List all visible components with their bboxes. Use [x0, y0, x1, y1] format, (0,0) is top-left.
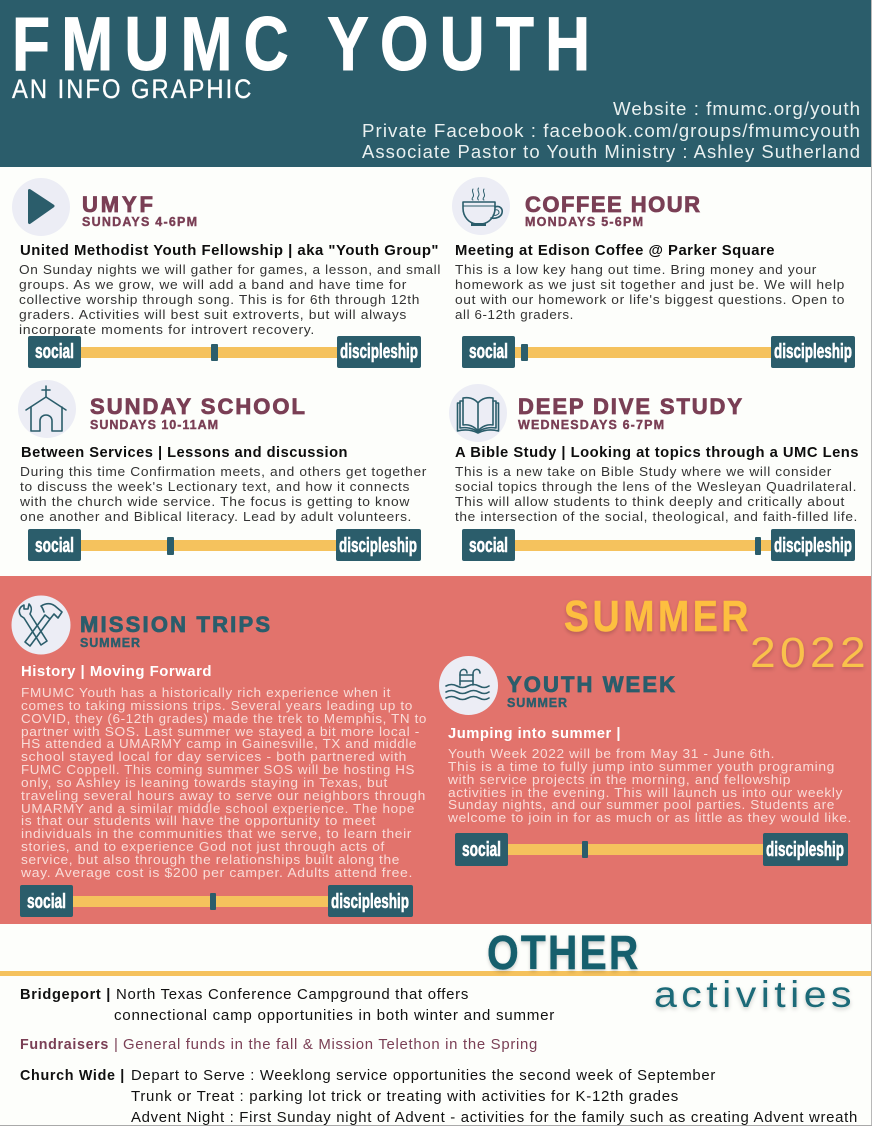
- description: Mission Trips: FUMC Coppell. This coming summer SOS will be hosting HS: [21, 762, 415, 777]
- slider: Mission Trips social to discipleship: [20, 885, 413, 917]
- list item: Bridgeport: connectional camp opportunities in both winter and summer: [114, 1007, 555, 1024]
- contact details: Website : fmumc.org/youth: [613, 99, 861, 119]
- heading: Summer: SUMMER: [564, 591, 748, 641]
- list item: Bridgeport: Bridgeport |: [20, 986, 111, 1003]
- panel: Mission Trips: [12, 596, 427, 917]
- description: Mission Trips: HS attended a UMARMY camp in Gainesville, TX and middle: [21, 736, 417, 751]
- slider: Sunday School social to discipleship: discipleship: [339, 535, 417, 557]
- description: Youth Week: with service projects in the morning, and fellowship: [447, 772, 791, 787]
- description: Deep Dive Study: the intersection of the social, theological, and faith-filled life.: [455, 509, 858, 524]
- slider: Deep Dive Study social to discipleship: [462, 529, 855, 561]
- description: UMYF: On Sunday nights we will gather for games, a lesson, and small: [19, 262, 441, 277]
- subheading: UMYF: United Methodist Youth Fellowship | aka "Youth Group": [20, 242, 439, 259]
- schedule: Youth Week: SUMMER: [507, 696, 567, 710]
- schedule: Sunday School: SUNDAYS 10-11AM: [90, 418, 218, 432]
- icon: coffee cup: [452, 177, 510, 235]
- panel: Deep Dive Study: [449, 384, 859, 561]
- panel: Youth Week: [439, 656, 852, 866]
- subheading: Coffee Hour: Meeting at Edison Coffee @ Parker Square: [455, 242, 775, 259]
- contact details: Associate Pastor to Youth Ministry : Ashley Sutherland: [362, 142, 861, 162]
- slider: Deep Dive Study social to discipleship: social: [469, 535, 508, 557]
- heading: 2022: 2022: [750, 629, 870, 677]
- slider: Sunday School social to discipleship: [28, 529, 421, 561]
- description: Coffee Hour: This is a low key hang out time. Bring money and your: [455, 262, 817, 277]
- heading: Coffee Hour: COFFEE HOUR: [525, 192, 700, 217]
- list item: Church Wide: Trunk or Treat : parking lot trick or treating with activities for K-12th grades: [131, 1088, 679, 1105]
- description: Youth Week: This is a time to fully jump into summer youth programing: [448, 759, 835, 774]
- heading: activities: activities: [654, 974, 856, 1015]
- list item: Fundraisers: |: [114, 1036, 119, 1053]
- description: Mission Trips: traveling several hours away to serve our neighbors through: [21, 788, 426, 803]
- description: Sunday School: During this time Confirmation meets, and others get together: [20, 464, 427, 479]
- list item: Church Wide: Depart to Serve : Weeklong service opportunities the second week of September: [131, 1067, 716, 1084]
- schedule: Mission Trips: SUMMER: [80, 636, 140, 650]
- description: UMYF: incorporate moments for introvert recovery.: [19, 322, 315, 337]
- description: Deep Dive Study: social topics through the lens of the Wesleyan Quadrilateral.: [455, 479, 857, 494]
- description: Mission Trips: COVID, they (6-12th grades) made the trek to Memphis, TN to: [21, 711, 427, 726]
- description: Mission Trips: stories, and to experience God not just through acts of: [21, 839, 385, 854]
- subtitle: AN INFO GRAPHIC: [12, 75, 251, 104]
- subheading: Deep Dive Study: A Bible Study | Looking at topics through a UMC Lens: [455, 444, 859, 461]
- description: Youth Week: Sunday nights, and our summer pool parties. Students are: [448, 797, 835, 812]
- description: Youth Week: Youth Week 2022 will be from May 31 - June 6th.: [448, 746, 775, 761]
- slider: Youth Week social to discipleship: social: [462, 839, 501, 861]
- description: Coffee Hour: out with our homework or life's biggest questions. Open to: [455, 292, 845, 307]
- slider: Coffee Hour social to discipleship: social: [469, 341, 508, 363]
- description: UMYF: groups. As we grow, we will add a band and have time for: [19, 277, 407, 292]
- icon: church: [18, 380, 76, 438]
- description: Sunday School: with the church wide service. The focus is getting to know: [19, 494, 410, 509]
- description: Mission Trips: comes to taking missions trips. Several years leading up to: [21, 698, 413, 713]
- description: Youth Week: [447, 746, 852, 825]
- slider: Mission Trips social to discipleship: social: [27, 891, 66, 913]
- list item: Church Wide: [20, 1067, 858, 1126]
- description: Deep Dive Study: This will allow students to think deeply and critically about: [455, 494, 845, 509]
- slider: UMYF social to discipleship: discipleship: [340, 341, 418, 363]
- description: Mission Trips: only, so Ashley is leaning towards staying in Texas, but: [21, 775, 388, 790]
- subheading: Youth Week: Jumping into summer |: [448, 725, 621, 742]
- description: UMYF: collective worship through song. This is for 6th through 12th: [19, 292, 420, 307]
- description: Mission Trips: school stayed local for day services - both partnered with: [21, 749, 407, 764]
- contact details: [362, 99, 861, 162]
- description: Youth Week: welcome to join in for as much or as little as they would like.: [447, 810, 852, 825]
- description: Mission Trips: service, but also through the relationships built along the: [21, 852, 400, 867]
- description: Sunday School: to discuss the week's Lectionary text, and how it connects: [20, 479, 410, 494]
- heading: Sunday School: SUNDAY SCHOOL: [90, 394, 305, 419]
- description: Mission Trips: partner with SOS. Last summer we stayed a bit more local -: [21, 724, 420, 739]
- schedule: Deep Dive Study: WEDNESDAYS 6-7PM: [518, 418, 664, 432]
- title: FMUMC YOUTH: [12, 1, 590, 86]
- schedule: UMYF: SUNDAYS 4-6PM: [82, 215, 197, 229]
- list item: Fundraisers: Fundraisers: [20, 1036, 109, 1053]
- description: Mission Trips: individuals in the communities that we serve, to learn their: [21, 826, 412, 841]
- heading: Other: OTHER: [487, 927, 638, 980]
- slider: Mission Trips social to discipleship: discipleship: [331, 891, 409, 913]
- heading: Deep Dive Study: DEEP DIVE STUDY: [518, 394, 742, 419]
- description: Youth Week: activities in the evening. This will launch us into our weekly: [448, 785, 843, 800]
- description: UMYF: [19, 262, 441, 337]
- list item: Church Wide: Church Wide |: [20, 1067, 125, 1084]
- slider: Coffee Hour social to discipleship: [462, 336, 855, 368]
- description: UMYF: graders. Activities will best suit extroverts, but will always: [19, 307, 407, 322]
- header banner: [0, 0, 872, 167]
- icon: hammer and wrench: [12, 596, 70, 654]
- heading: UMYF: UMYF: [82, 192, 153, 217]
- description: Deep Dive Study: This is a new take on Bible Study where we will consider: [455, 464, 832, 479]
- icon: open book: [449, 384, 507, 442]
- schedule: Coffee Hour: MONDAYS 5-6PM: [525, 215, 643, 229]
- list item: Bridgeport: [20, 986, 555, 1024]
- description: Sunday School: one another and Biblical literacy. Lead by adult volunteers.: [20, 509, 412, 524]
- panel: summer section: [0, 576, 872, 924]
- panel: UMYF: [12, 178, 441, 368]
- description: Coffee Hour: [455, 262, 845, 322]
- list item: Bridgeport: North Texas Conference Campground that offers: [116, 986, 469, 1003]
- panel: other activities: [0, 927, 872, 1126]
- description: Mission Trips: [20, 685, 427, 880]
- description: Mission Trips: UMARMY and a similar middle school experience. The hope: [21, 801, 415, 816]
- panel: Sunday School: [18, 380, 427, 561]
- slider: UMYF social to discipleship: social: [35, 341, 74, 363]
- subheading: Mission Trips: History | Moving Forward: [21, 663, 212, 680]
- description: Coffee Hour: homework as we just sit together and just be. We will help: [455, 277, 845, 292]
- icon: play button: [12, 178, 70, 236]
- heading: Mission Trips: MISSION TRIPS: [80, 612, 270, 637]
- heading: Youth Week: YOUTH WEEK: [507, 672, 675, 697]
- description: Deep Dive Study: [455, 464, 858, 524]
- description: Sunday School: [19, 464, 427, 524]
- panel: Coffee Hour: [452, 177, 855, 368]
- contact details: Private Facebook : facebook.com/groups/fmumcyouth: [362, 121, 861, 141]
- slider: Sunday School social to discipleship: social: [35, 535, 74, 557]
- description: Mission Trips: FMUMC Youth has a historically rich experience when it: [21, 685, 391, 700]
- subheading: Sunday School: Between Services | Lessons and discussion: [21, 444, 348, 461]
- slider: Youth Week social to discipleship: [455, 833, 848, 866]
- slider: UMYF social to discipleship: [28, 336, 421, 368]
- description: Mission Trips: way. Average cost is $200 per camper. Adults attend free.: [20, 865, 413, 880]
- description: Mission Trips: is that our students will have the opportunity to meet: [21, 813, 376, 828]
- list item: Fundraisers: General funds in the fall & Mission Telethon in the Spring: [123, 1036, 538, 1053]
- description: Coffee Hour: all 6-12th graders.: [455, 307, 574, 322]
- icon: swimming pool: [439, 656, 498, 715]
- list item: Church Wide: Advent Night : First Sunday night of Advent - activities for the family such as creating Advent wreath: [131, 1109, 858, 1126]
